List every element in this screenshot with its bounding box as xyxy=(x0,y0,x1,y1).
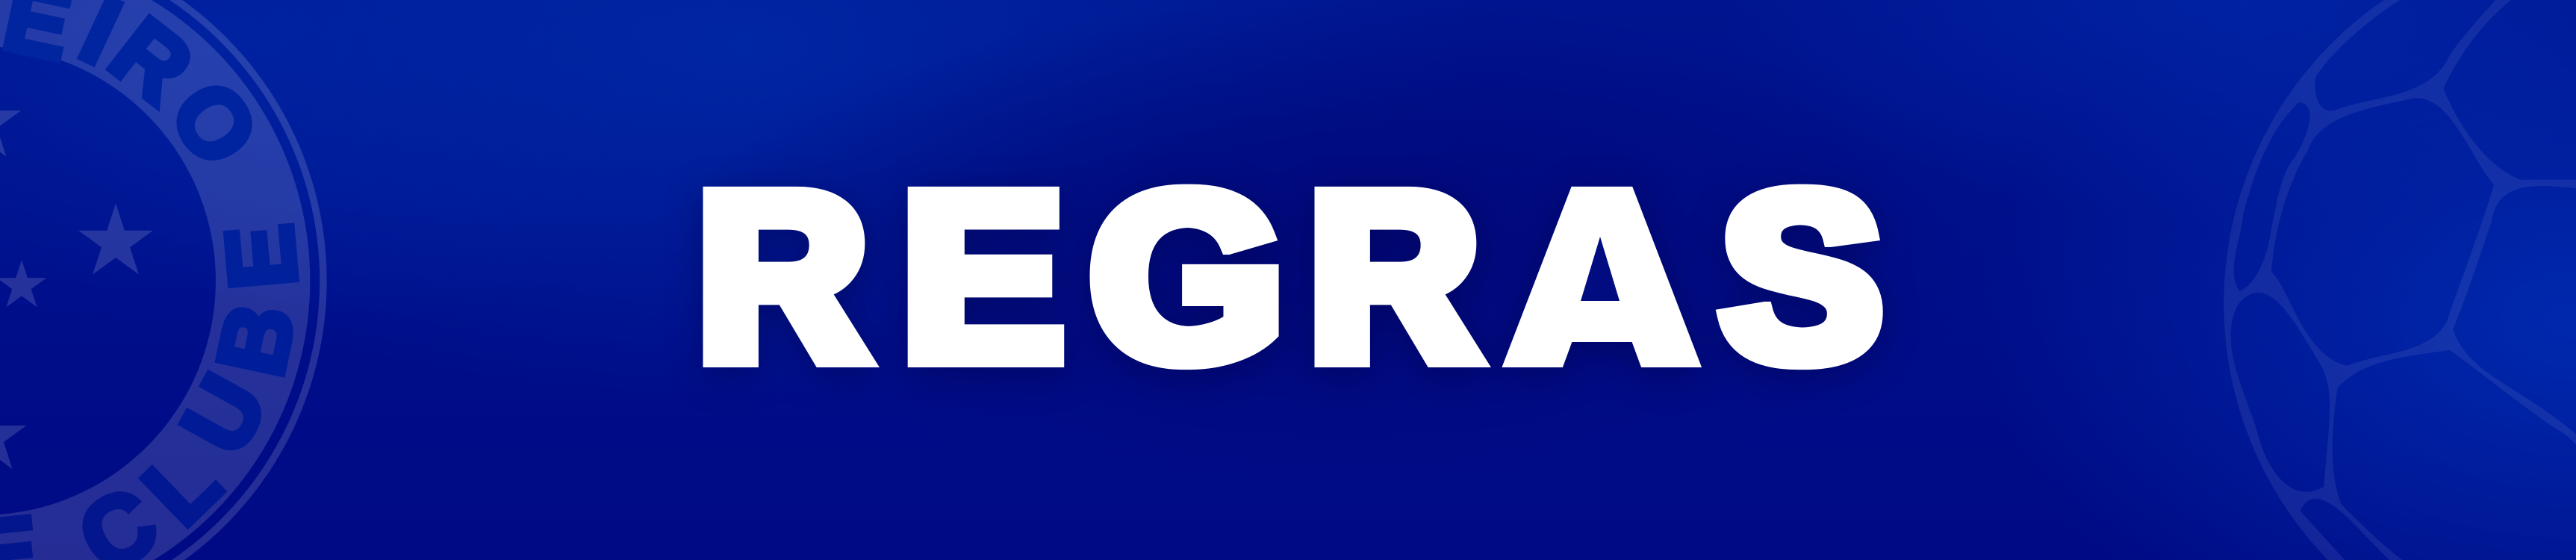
crest lettering: L xyxy=(124,428,240,545)
crest lettering: O xyxy=(149,63,279,184)
crest lettering: B xyxy=(197,295,316,385)
crest outer ring xyxy=(169,0,327,560)
crest lettering: E xyxy=(206,220,317,293)
crest watermark: left badge xyxy=(0,0,327,560)
title: REGRAS: A xyxy=(1511,143,1693,410)
title: REGRAS: S xyxy=(1722,143,1881,410)
crest stars xyxy=(0,82,153,469)
title: REGRAS: R xyxy=(698,143,867,410)
title: REGRAS: R xyxy=(1310,143,1478,410)
crest lettering xyxy=(0,0,317,560)
title: REGRAS xyxy=(698,143,1881,410)
crest lettering: U xyxy=(161,358,287,470)
title: REGRAS: G xyxy=(1091,143,1283,410)
crest band xyxy=(0,0,310,560)
football watermark: right ball xyxy=(2224,0,2576,560)
title: REGRAS: E xyxy=(903,143,1063,410)
crest lettering: R xyxy=(91,0,211,124)
